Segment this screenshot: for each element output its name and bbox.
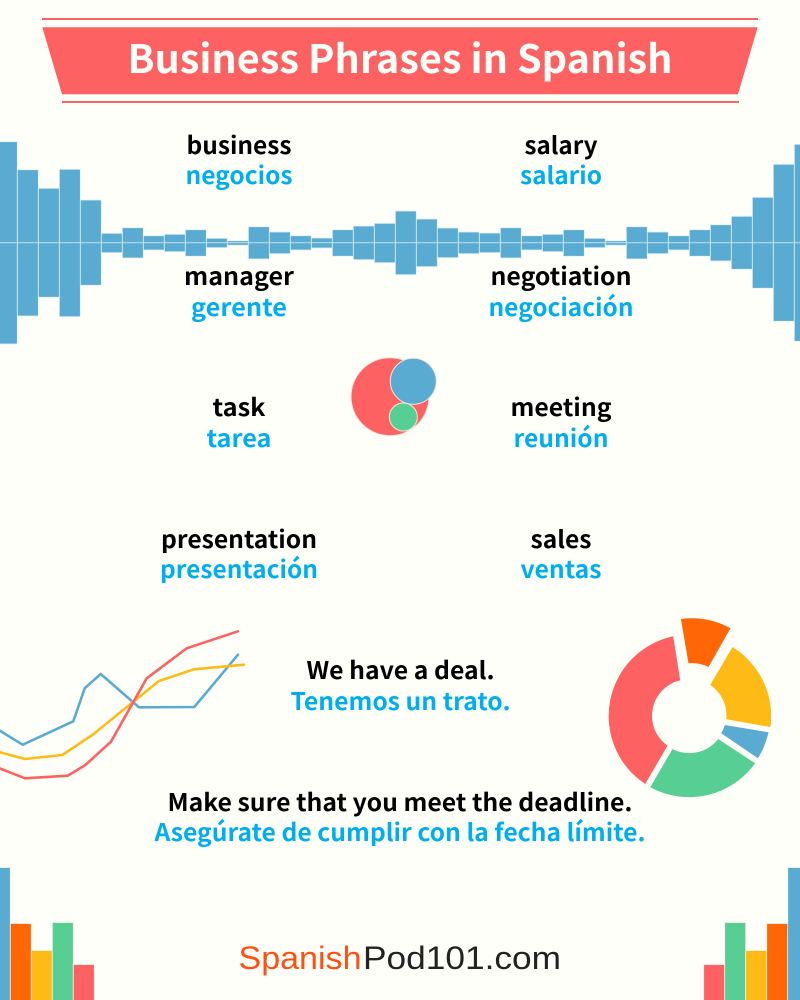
phrase: business: negocios [186, 156, 293, 191]
phrase: manager: gerente [191, 288, 287, 323]
waveform bar chart [0, 142, 800, 344]
logo: Spanish [238, 940, 362, 976]
phrase: task: task [212, 388, 266, 423]
slice: red [609, 636, 680, 784]
slice: green [650, 739, 755, 797]
bottom right bars [704, 868, 800, 1000]
phrase: task: tarea [206, 419, 272, 454]
slice: orange [681, 618, 730, 667]
phrase: business [186, 126, 293, 191]
phrase: we have a deal [290, 651, 510, 717]
phrase: sales: ventas [520, 550, 602, 585]
phrase: salary [520, 126, 602, 191]
line chart [0, 631, 244, 778]
phrase: manager [184, 257, 295, 323]
phrase: meet the deadline: Make sure that you meet the deadline. [168, 783, 632, 818]
phrase: salary: salary [524, 126, 598, 161]
phrase: meeting: reunión [514, 419, 608, 454]
title banner [42, 18, 758, 103]
phrase: business: business [186, 126, 292, 161]
phrase: meet the deadline [153, 783, 646, 848]
phrase: we have a deal: Tenemos un trato. [290, 682, 510, 717]
phrase: negotiation: negociación [488, 288, 634, 323]
bottom left bars [0, 868, 94, 1000]
phrase: presentation: presentación [160, 550, 318, 585]
bubble chart [351, 358, 436, 436]
phrase: sales [520, 520, 602, 585]
phrase: presentation: presentation [161, 520, 317, 555]
phrase: negotiation [488, 257, 634, 323]
phrase: meet the deadline: Asegúrate de cumplir con la fecha límite. [153, 813, 646, 848]
phrase: sales: sales [530, 520, 592, 555]
phrase: task [206, 388, 272, 454]
slice: yellow [710, 647, 771, 727]
phrase: we have a deal: We have a deal. [306, 651, 494, 686]
phrase: meeting: meeting [510, 388, 612, 423]
phrase: manager: manager [184, 257, 295, 292]
donut chart [609, 618, 771, 797]
phrase: negotiation: negotiation [490, 257, 632, 292]
logo: Pod101.com [363, 940, 561, 976]
phrase: salary: salario [520, 156, 602, 191]
slice: blue [721, 725, 768, 758]
phrase: meeting [510, 388, 612, 454]
logo [238, 940, 561, 976]
title: Business Phrases in Spanish [128, 29, 672, 85]
phrase: presentation [160, 520, 318, 585]
